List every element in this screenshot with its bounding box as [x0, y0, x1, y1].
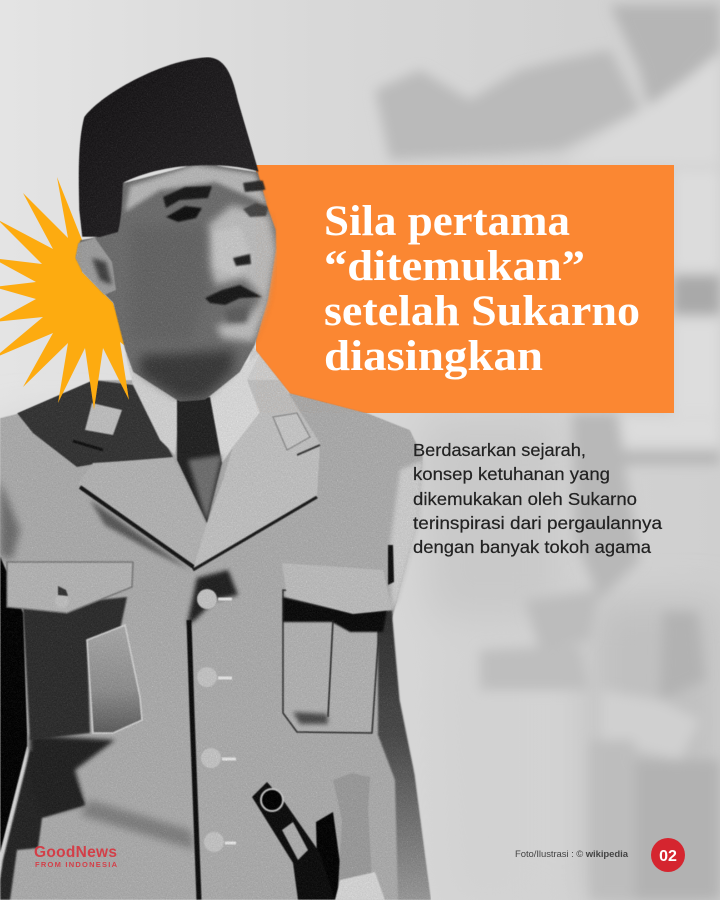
- sunburst icon: [0, 177, 129, 410]
- title: [324, 198, 640, 380]
- title: setelah Sukarno: [324, 288, 640, 335]
- body text: dengan banyak tokoh agama: [413, 537, 651, 557]
- fez hat: [79, 57, 259, 237]
- portrait head of Sukarno: [75, 57, 277, 402]
- title panel: [256, 165, 674, 413]
- body text: dikemukakan oleh Sukarno: [413, 489, 637, 509]
- logo: GoodNews from Indonesia: GoodNews: [34, 844, 117, 861]
- body text: konsep ketuhanan yang: [413, 464, 610, 484]
- page number badge: [651, 838, 685, 872]
- left pocket: [7, 562, 142, 740]
- logo: GoodNews from Indonesia: FROM INDONESIA: [35, 860, 118, 869]
- title: Sila pertama: [324, 198, 570, 245]
- left sleeve and shadows: [0, 556, 27, 853]
- body text: Berdasarkan sejarah,: [413, 440, 586, 460]
- buttons: [197, 589, 236, 852]
- jacket of Sukarno: [0, 345, 431, 900]
- ear: [75, 238, 116, 295]
- photo credit: Foto/Ilustrasi : © wikipedia: [515, 849, 629, 860]
- keris dagger and belt: [252, 773, 385, 900]
- facial features: [163, 180, 268, 322]
- face and neck: [76, 163, 276, 402]
- page number badge: 02: [659, 848, 677, 865]
- logo: GoodNews from Indonesia: [34, 844, 118, 869]
- body text: [413, 440, 662, 557]
- collar and shirt: [125, 353, 180, 455]
- title: diasingkan: [324, 333, 543, 380]
- right pocket: [282, 563, 392, 733]
- body text: terinspirasi dari pergaulannya: [413, 513, 662, 533]
- placket shadow: [187, 570, 238, 900]
- title: “ditemukan”: [324, 243, 585, 290]
- right lapel: [193, 380, 320, 570]
- arm shadow: [378, 610, 431, 900]
- insignia: [73, 403, 320, 455]
- dark collar shadow: [17, 380, 173, 467]
- tie: [177, 397, 222, 523]
- left lapel: [78, 458, 207, 570]
